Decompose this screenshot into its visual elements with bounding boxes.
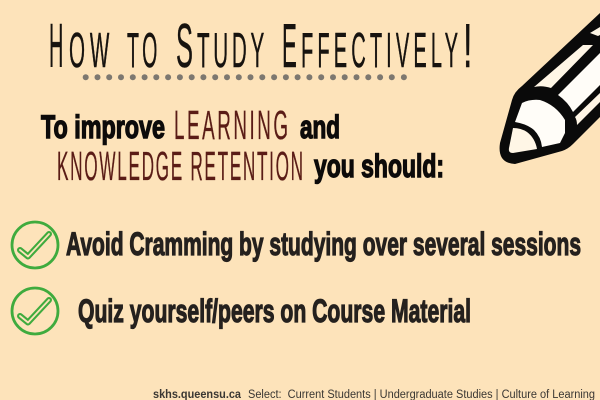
subheading: you should: [314,148,444,184]
subheading: KNOWLEDGE RETENTION [57,143,303,189]
title [49,10,472,81]
icon: pencil [500,13,600,164]
title: TUDY [197,23,264,77]
title: TO [127,22,157,78]
icon: check circle 2 [12,288,58,334]
title: OW [69,23,110,77]
icon: check circle 1 [12,222,58,268]
title: H [49,10,63,80]
subheading: To improve [41,109,165,145]
title: S [176,12,193,81]
title: FFECTIVELY [301,23,458,77]
dotted divider [83,74,407,80]
title: ! [463,11,472,81]
subheading [41,102,444,189]
subheading: and [300,109,340,145]
subheading: LEARNING [174,102,288,148]
title: E [282,11,297,80]
